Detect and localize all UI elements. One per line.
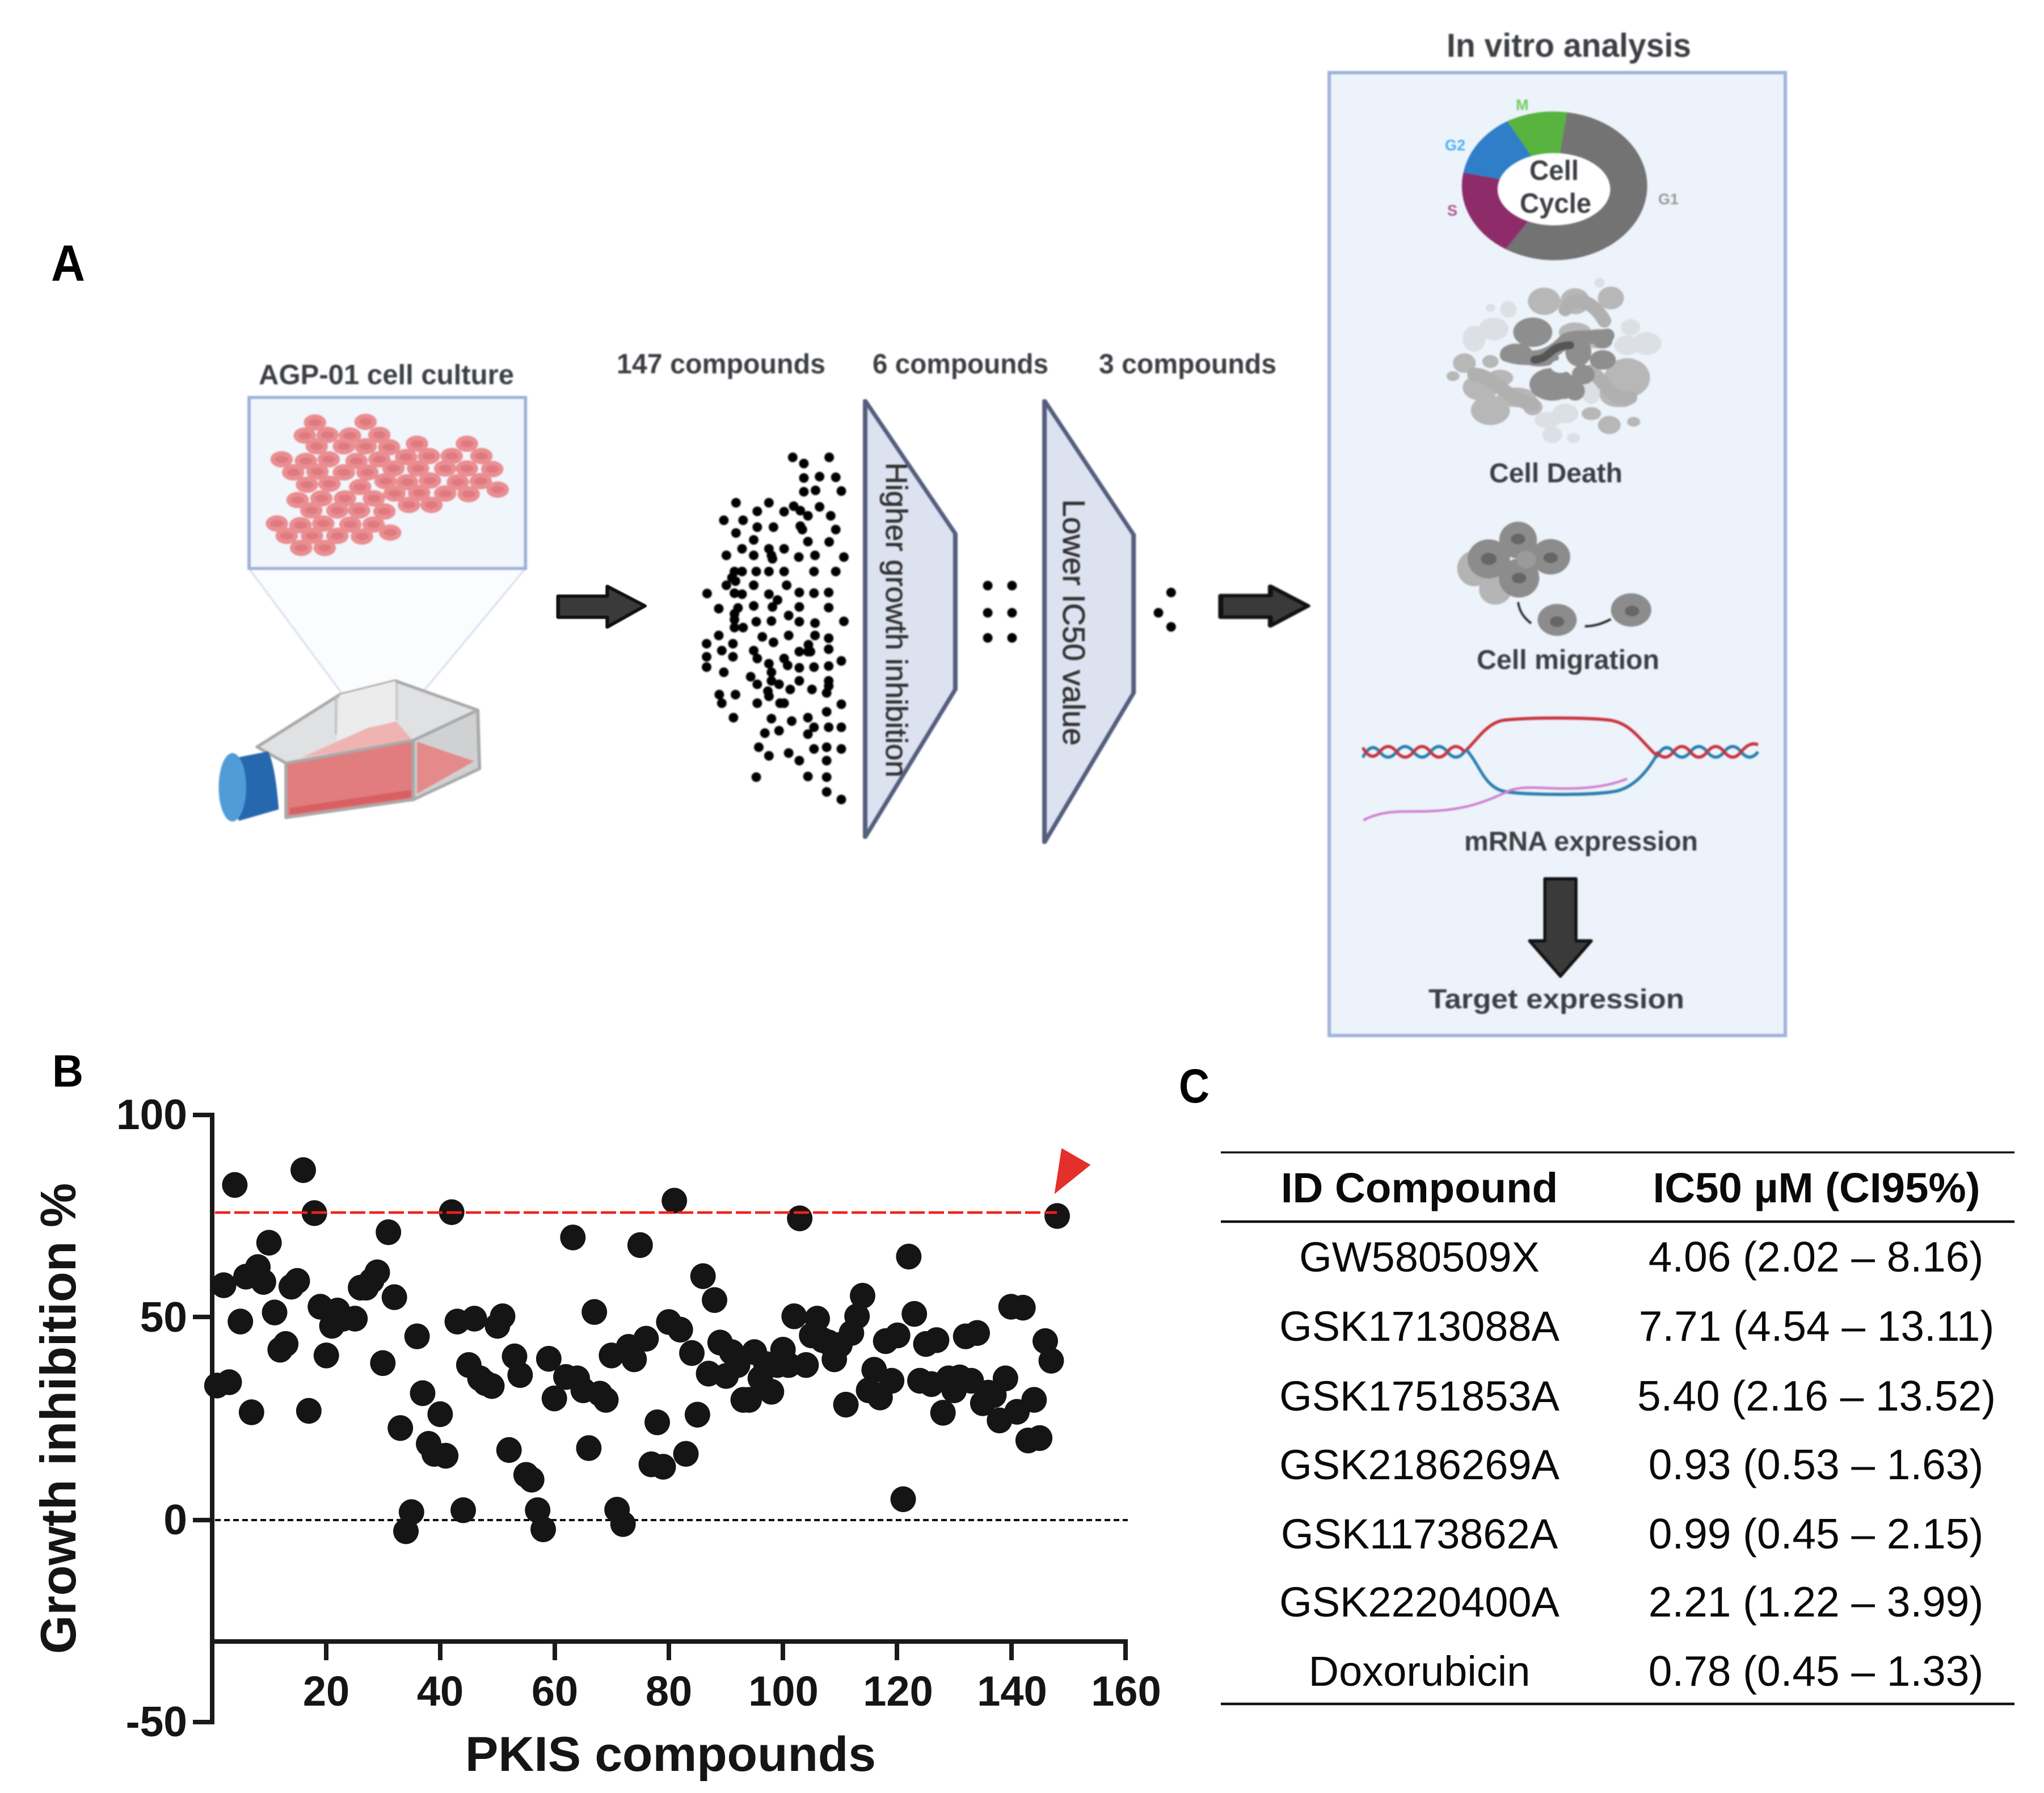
x axis tick labels: 60 (532, 1668, 578, 1715)
red threshold line (215, 1211, 1057, 1214)
donut label: Cell: Cell (1529, 155, 1579, 186)
table header: IC50 µM (CI95%) (1653, 1164, 1980, 1211)
compound id column (1279, 1234, 1560, 1695)
panel B: scatter chart (30, 1091, 1161, 1782)
culture image box (249, 397, 525, 569)
x axis tick labels: 120 (863, 1668, 933, 1715)
table header: ID Compound (1281, 1164, 1558, 1211)
compound id column: GSK1173862A (1281, 1510, 1558, 1558)
x axis tick labels: 40 (417, 1668, 463, 1715)
y axis tick labels: 0 (163, 1496, 187, 1543)
table rules (1221, 1152, 2015, 1704)
y axis tick labels (116, 1091, 187, 1745)
x axis tick labels: 80 (646, 1668, 692, 1715)
label: 147 compounds: 147 compounds (617, 349, 825, 380)
icon: culture flask (218, 681, 479, 822)
y axis tick labels: -50 (126, 1698, 187, 1745)
zero reference line (215, 1519, 1128, 1521)
compound id column: GSK1751853A (1279, 1373, 1560, 1420)
label: Cell Death: Cell Death (1489, 458, 1622, 489)
phase label S: S (1447, 202, 1457, 219)
panel label C: C (1179, 1059, 1209, 1113)
y axis title: Growth inhibition % (30, 1183, 86, 1654)
axes (193, 1115, 1128, 1722)
x axis tick labels: 20 (303, 1668, 349, 1715)
x axis tick labels (303, 1668, 1161, 1715)
panel label B: B (52, 1046, 83, 1096)
compound id column: GSK2186269A (1279, 1441, 1560, 1488)
scatter of 147 compounds (702, 453, 849, 804)
phase label M: M (1516, 96, 1528, 113)
IC50 values column: 2.21 (1.22 – 3.99) (1649, 1578, 1983, 1626)
icon: DNA transcription bubble (1363, 718, 1758, 820)
magnification cone (249, 569, 525, 728)
panel C: IC50 table (1221, 1152, 2015, 1704)
compound id column: GSK1713088A (1279, 1303, 1560, 1350)
IC50 values column: 0.99 (0.45 – 2.15) (1649, 1510, 1983, 1558)
IC50 values column: 5.40 (2.16 – 13.52) (1637, 1372, 1996, 1420)
filter 1 text: Higher growth inhibition (879, 462, 913, 777)
filter 2 text: Lower IC50 value (1056, 499, 1091, 746)
data points left half (204, 1158, 579, 1544)
IC50 values column: 0.78 (0.45 – 1.33) (1649, 1647, 1983, 1695)
six compound dots (983, 581, 1017, 643)
x axis tick labels: 160 (1091, 1668, 1161, 1715)
heading: in vitro analysis: In vitro analysis (1447, 27, 1691, 64)
label: Target expression: Target expression (1428, 984, 1684, 1015)
compound id column: GW580509X (1299, 1234, 1540, 1281)
y axis tick labels: 50 (140, 1293, 187, 1341)
filter 1: higher growth inhibition (865, 401, 955, 837)
IC50 values column: 0.93 (0.53 – 1.63) (1649, 1441, 1983, 1488)
red marker arrowhead (1055, 1148, 1090, 1194)
x axis title: PKIS compounds (465, 1727, 876, 1782)
IC50 values column: 7.71 (4.54 – 13.11) (1639, 1302, 1994, 1350)
panel A: compound funnel (617, 349, 1308, 843)
chart: cell cycle donut (1462, 112, 1647, 260)
filter 2: lower IC50 value (1044, 401, 1133, 843)
label: mRNA expression: mRNA expression (1464, 827, 1698, 857)
table header (1281, 1164, 1980, 1211)
panel label A: A (51, 235, 85, 292)
arrow: culture to compounds (558, 586, 645, 627)
donut label: Cycle: Cycle (1520, 188, 1591, 219)
red cells (265, 414, 509, 556)
x axis tick labels: 100 (748, 1668, 819, 1715)
panel: in vitro analysis (1329, 73, 1785, 1036)
compound id column: Doxorubicin (1309, 1648, 1530, 1695)
x axis tick labels: 140 (977, 1668, 1047, 1715)
arrow: down to target expression (1529, 879, 1591, 977)
label: Cell migration: Cell migration (1477, 645, 1659, 675)
phase label G2: G2 (1445, 137, 1465, 154)
phase label G1: G1 (1658, 191, 1679, 208)
panel A: cell culture (218, 360, 525, 822)
data points right half (560, 1188, 1070, 1537)
icon: cell migration (1457, 521, 1651, 636)
three compound dots (1154, 588, 1176, 632)
icon: cell death (1447, 278, 1662, 443)
IC50 values column (1637, 1233, 1996, 1695)
arrow: compounds to in vitro analysis (1221, 586, 1308, 626)
heading: AGP-01 cell culture: AGP-01 cell culture (259, 360, 514, 390)
compound id column: GSK2220400A (1279, 1579, 1560, 1626)
label: 3 compounds: 3 compounds (1099, 349, 1276, 380)
label: 6 compounds: 6 compounds (873, 349, 1048, 380)
y axis tick labels: 100 (116, 1091, 187, 1138)
IC50 values column: 4.06 (2.02 – 8.16) (1649, 1233, 1983, 1281)
